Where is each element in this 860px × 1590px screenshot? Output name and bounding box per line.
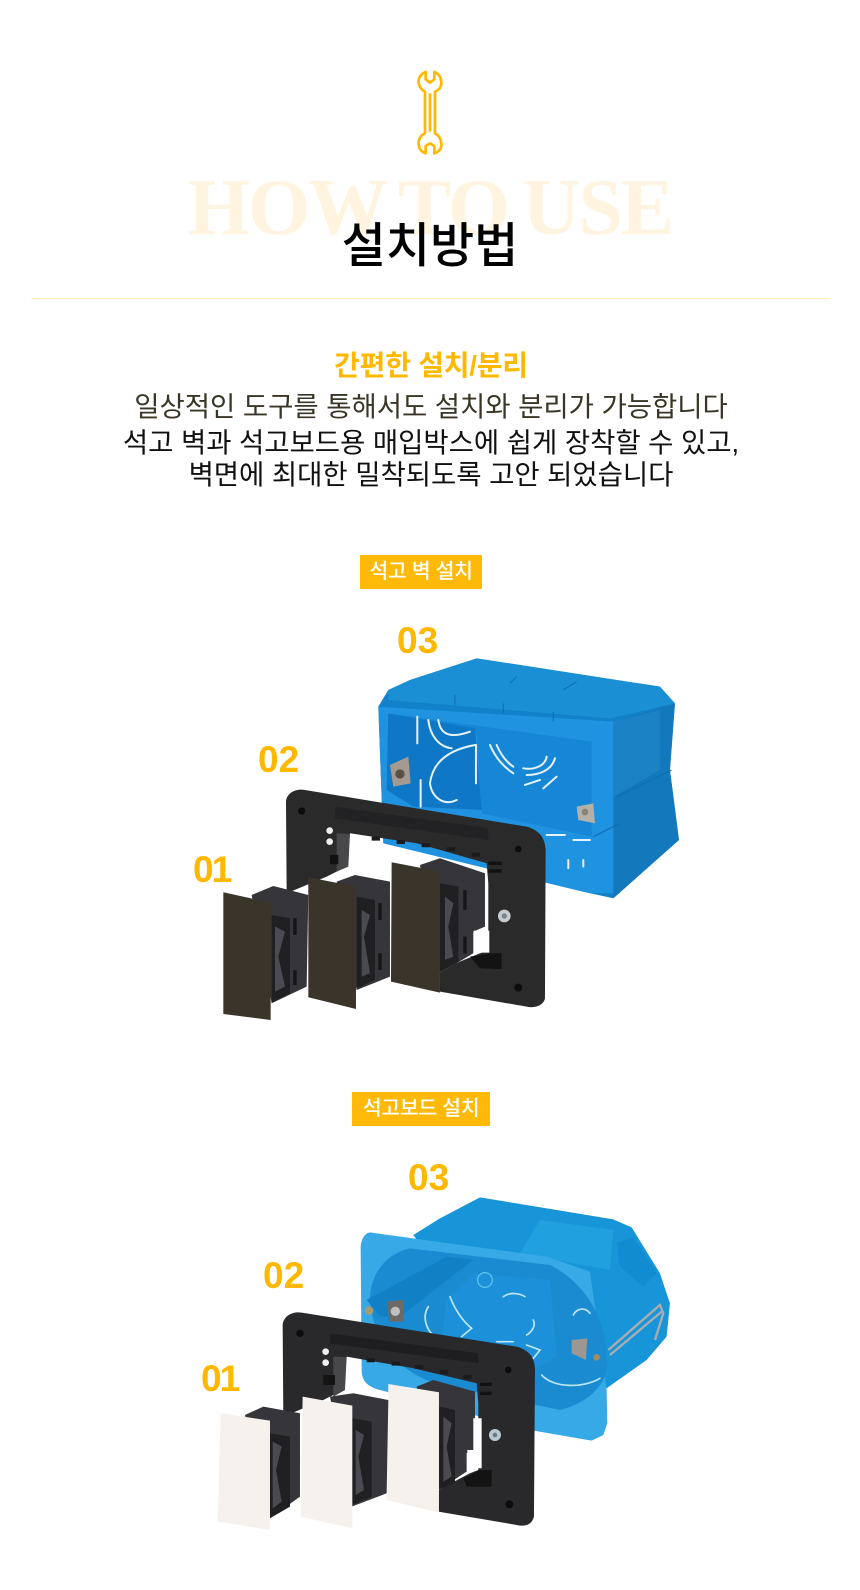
title: 설치방법 <box>342 220 518 273</box>
description text: 석고 벽과 석고보드용 매입박스에 쉽게 장착할 수 있고, <box>123 427 739 458</box>
number 01: 01 <box>193 849 230 890</box>
tag: masonry wall install <box>360 555 482 588</box>
description text <box>123 391 739 490</box>
number 01: 01 <box>201 1358 238 1399</box>
number 03: 03 <box>408 1157 449 1198</box>
icon: wrench <box>417 70 443 155</box>
module 1 <box>223 886 308 1020</box>
black mounting frame <box>283 1312 535 1526</box>
module 3 <box>387 1380 475 1513</box>
description text: 일상적인 도구를 통해서도 설치와 분리가 가능합니다 <box>134 391 728 422</box>
blue box <box>361 1197 670 1441</box>
subheading: 간편한 설치/분리 <box>334 350 528 381</box>
tag: drywall install: 석고보드 설치 <box>363 1097 479 1120</box>
diagram: masonry wall install exploded view <box>223 658 679 1020</box>
module 2 <box>301 1393 388 1528</box>
blue box <box>378 658 679 898</box>
tag: drywall install <box>352 1092 490 1126</box>
number 03: 03 <box>397 620 438 661</box>
module 3 <box>391 858 485 993</box>
tag: masonry wall install: 석고 벽 설치 <box>369 560 473 583</box>
background heading: HOW TO USE: HOW TO USE <box>188 164 672 252</box>
diagram: drywall install exploded view <box>218 1197 670 1530</box>
module 2 <box>308 875 390 1009</box>
module 1 <box>218 1407 300 1530</box>
number 02: 02 <box>258 739 299 780</box>
number 02: 02 <box>263 1255 304 1296</box>
description text: 벽면에 최대한 밀착되도록 고안 되었습니다 <box>189 459 673 490</box>
black mounting frame <box>286 790 546 1007</box>
